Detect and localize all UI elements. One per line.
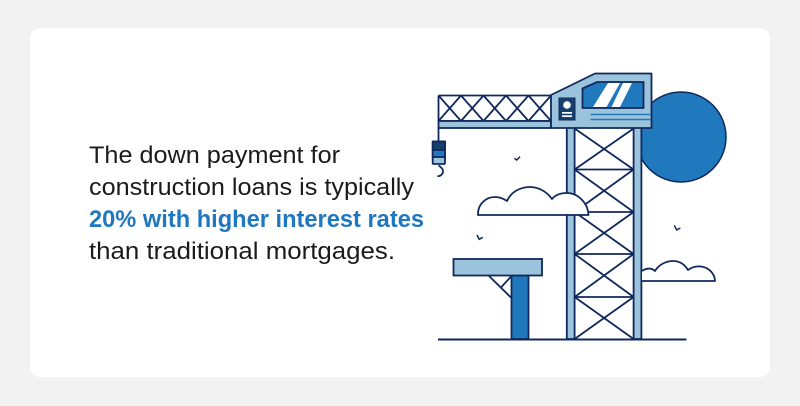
ground line [438,338,686,340]
illustration: large cloud [478,187,588,215]
text block: down payment statement: construction loans is typically [89,174,414,201]
tower right leg [634,127,641,339]
tower left leg [567,127,575,339]
window reflections [593,83,632,107]
illustration: crane tower [567,127,641,339]
column [512,275,528,339]
beam top [454,259,542,276]
cab window [582,82,644,108]
tower lattice [575,128,634,339]
illustration: concrete beam and column [454,259,542,339]
panel: white card [30,28,770,377]
cab stripes [590,114,651,120]
text block: down payment statement: than traditional mortgages. [89,238,395,265]
text block: down payment statement [89,142,424,265]
text block: down payment statement: 20% with higher interest rates [89,206,424,233]
icon: sun [636,92,726,182]
text block: down payment statement: The down payment for [89,142,340,169]
icon: crane hook [433,128,445,176]
icon: birds [477,157,680,239]
cab badge [559,98,575,120]
cab body [551,74,652,128]
jib lower band [438,121,551,128]
illustration: small cloud [642,261,715,281]
illustration: crane cab [551,74,652,128]
beam brace [489,276,512,298]
jib lattice [438,96,551,121]
illustration: crane jib [438,96,551,128]
